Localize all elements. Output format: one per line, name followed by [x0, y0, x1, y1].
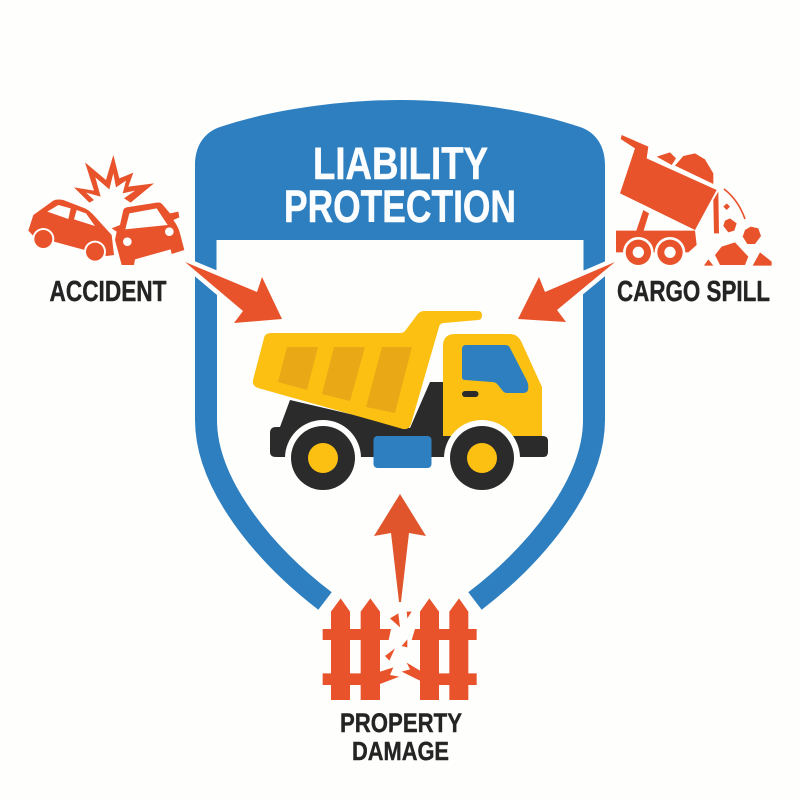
shield white interior	[216, 240, 584, 280]
shield left band	[206, 235, 325, 601]
bed panel 2	[322, 347, 365, 401]
truck cab	[443, 334, 542, 436]
tailgate	[713, 192, 719, 233]
icon: cargo spill	[616, 135, 772, 268]
panel: shield	[195, 100, 605, 601]
truck fuel tank	[374, 436, 432, 468]
spilled rocks	[704, 203, 772, 266]
icon: car accident	[28, 155, 184, 265]
bed panel 1	[278, 347, 318, 390]
tipped bed	[620, 135, 717, 230]
debris arc	[724, 189, 745, 219]
title: LIABILITY	[313, 138, 488, 189]
title	[284, 138, 516, 232]
label: property damage	[340, 708, 462, 766]
right fence section	[402, 598, 477, 700]
truck dump bed	[253, 311, 482, 429]
label: property damage: PROPERTY	[340, 708, 462, 738]
rear wheel	[285, 420, 361, 490]
shield right band	[475, 235, 594, 601]
truck frame	[616, 231, 697, 252]
dump wheels	[623, 237, 685, 268]
shield header	[195, 100, 605, 240]
load rocks	[657, 152, 713, 184]
left fence section	[323, 598, 399, 700]
icon: broken fence	[323, 598, 477, 700]
explosion burst	[74, 155, 154, 203]
truck door handle	[462, 391, 478, 397]
icon: dump truck	[253, 311, 548, 490]
label: accident: ACCIDENT	[50, 276, 167, 308]
truck cab window	[462, 345, 528, 393]
right car	[112, 203, 184, 265]
arrow: property damage to truck	[374, 494, 426, 602]
label: property damage: DAMAGE	[352, 736, 449, 766]
arrow: accident to truck	[185, 262, 282, 323]
title: PROTECTION	[284, 181, 516, 232]
bed panel 3	[366, 347, 412, 413]
arrow: cargo spill to truck	[518, 262, 615, 322]
fence splinters	[385, 612, 412, 661]
lift arm	[636, 210, 649, 232]
front wheel	[444, 420, 520, 490]
truck chassis	[270, 382, 548, 457]
left car	[28, 199, 114, 263]
